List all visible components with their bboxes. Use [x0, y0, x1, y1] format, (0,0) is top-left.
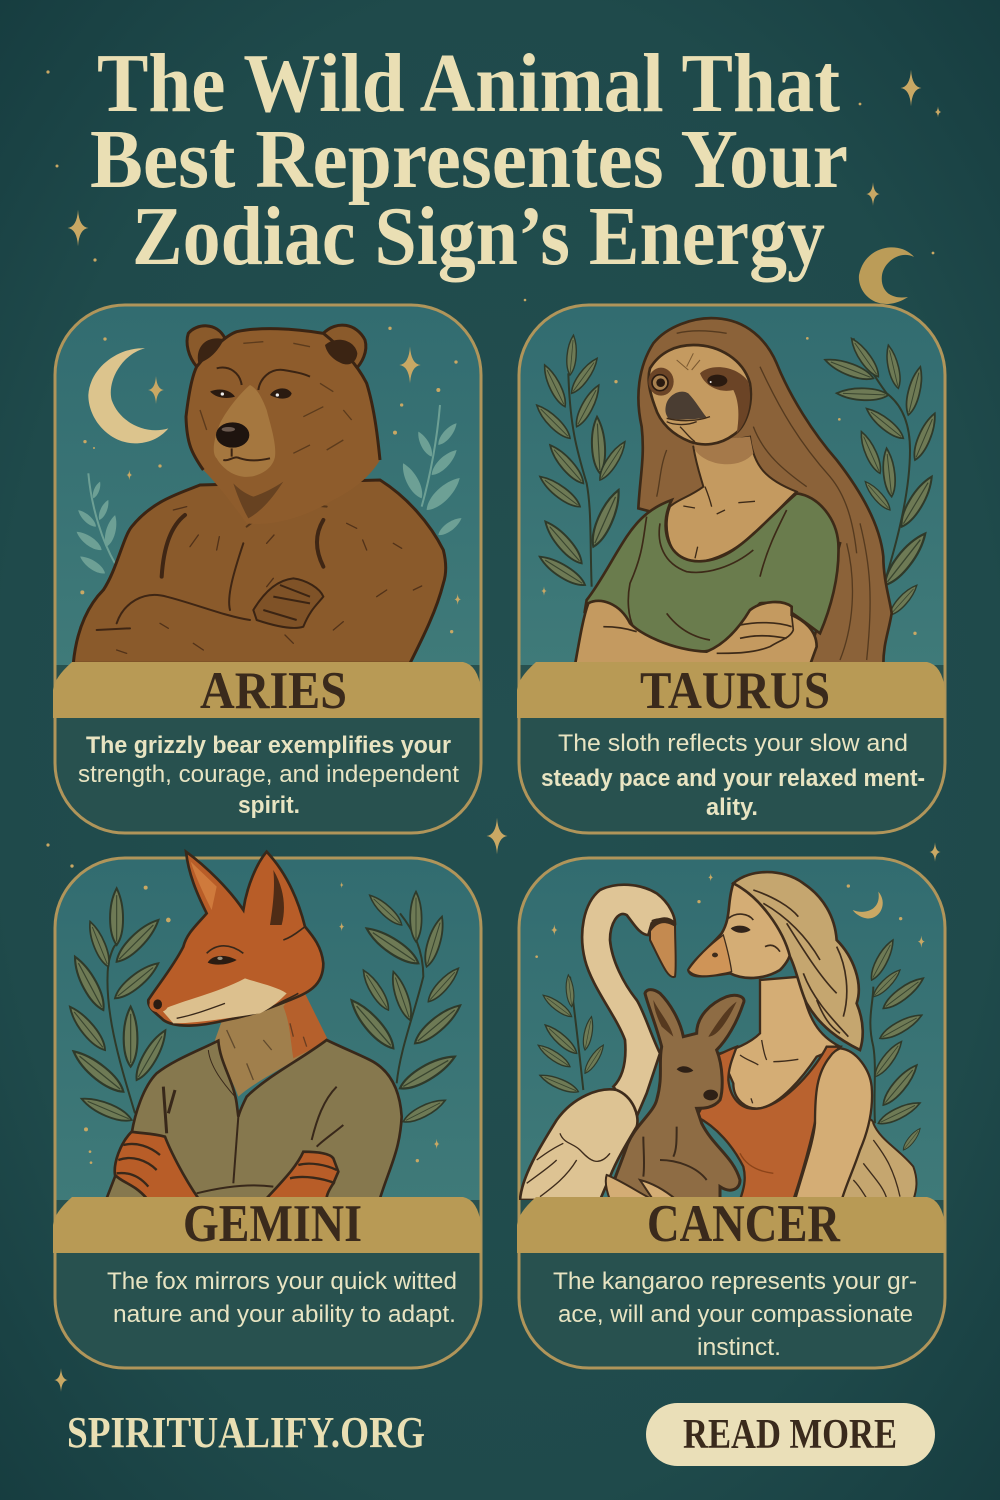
neck and chest [667, 437, 797, 562]
pale leaves [88, 405, 440, 563]
description: Cancer: instinct. [697, 1334, 781, 1361]
icon: moon [88, 348, 168, 443]
panel: Gemini [53, 852, 481, 1368]
description: Taurus: ality. [706, 794, 758, 821]
neck [215, 1003, 312, 1096]
stars [80, 327, 461, 633]
bear ears [187, 326, 225, 367]
arms and hands [575, 601, 817, 665]
description: Cancer [553, 1268, 917, 1361]
woman hands [606, 1175, 653, 1200]
decorative stars [46, 70, 941, 1392]
bear head [186, 329, 380, 524]
panel: Taurus [517, 305, 945, 833]
heading: Taurus: TAURUS [640, 662, 830, 720]
description: Taurus: steady pace and your relaxed ment- [541, 765, 925, 792]
description: Aries: spirit. [238, 792, 300, 819]
stars and small moon [535, 873, 925, 958]
leaves left [536, 974, 607, 1096]
stars [541, 337, 917, 635]
illustration: sloth [533, 318, 940, 665]
description: Gemini: The fox mirrors your quick witted [107, 1268, 457, 1295]
panel: Aries [53, 305, 481, 833]
bear hand [253, 578, 323, 628]
description: Cancer: ace, will and your compassionate [558, 1301, 913, 1328]
bear body [73, 480, 446, 663]
leaves right [346, 892, 464, 1126]
description: Taurus [541, 730, 925, 821]
title: Best Representes Your [90, 113, 848, 206]
sloth face [649, 345, 751, 444]
woman face [688, 883, 791, 978]
description: Gemini [107, 1268, 457, 1328]
arm [795, 1048, 872, 1200]
fox hands [115, 1132, 198, 1198]
description: Aries: The grizzly bear exemplifies your [86, 732, 451, 759]
leaves right [867, 937, 927, 1152]
band: Cancer [517, 1197, 945, 1253]
icon: crescent moon [859, 247, 914, 304]
top [697, 1047, 840, 1200]
band: Aries [53, 662, 481, 718]
title: The Wild Animal That [97, 37, 840, 130]
title [90, 37, 848, 283]
fox head [148, 852, 323, 1026]
heading: Gemini: GEMINI [183, 1195, 362, 1253]
woman neck and chest [720, 977, 840, 1109]
title: Zodiac Sign’s Energy [132, 190, 825, 283]
description: Aries: strength, courage, and independent [78, 761, 459, 788]
shirt [585, 493, 839, 652]
band: Taurus [517, 662, 945, 718]
heading: Aries: ARIES [200, 662, 347, 720]
lower hair [840, 1119, 916, 1200]
shirt [107, 1040, 402, 1198]
description: Gemini: nature and your ability to adapt. [113, 1301, 456, 1328]
button: read more [646, 1403, 935, 1466]
heading: Cancer: CANCER [647, 1195, 841, 1253]
button: read more: READ MORE [683, 1412, 897, 1458]
illustration: fox [65, 852, 464, 1198]
bear fur and arms [97, 506, 422, 653]
description: Cancer: The kangaroo represents your gr- [553, 1268, 917, 1295]
illustration: swan, kangaroo, woman [520, 872, 927, 1200]
band: Gemini [53, 1197, 481, 1253]
leaves left [533, 335, 629, 590]
hair [638, 318, 892, 665]
website label: SPIRITUALIFY.ORG [67, 1408, 425, 1457]
description: Aries [78, 732, 459, 819]
leaves left [65, 888, 171, 1126]
illustration: bear [73, 325, 464, 663]
swan wing [520, 1089, 637, 1200]
stars [70, 864, 440, 1164]
panel: Cancer [517, 858, 945, 1368]
description: Taurus: The sloth reflects your slow and [558, 730, 908, 757]
front hair [733, 872, 863, 1050]
swan beak [650, 918, 676, 977]
leaves right [823, 335, 940, 618]
kangaroo [610, 990, 744, 1200]
swan neck [582, 885, 675, 1117]
